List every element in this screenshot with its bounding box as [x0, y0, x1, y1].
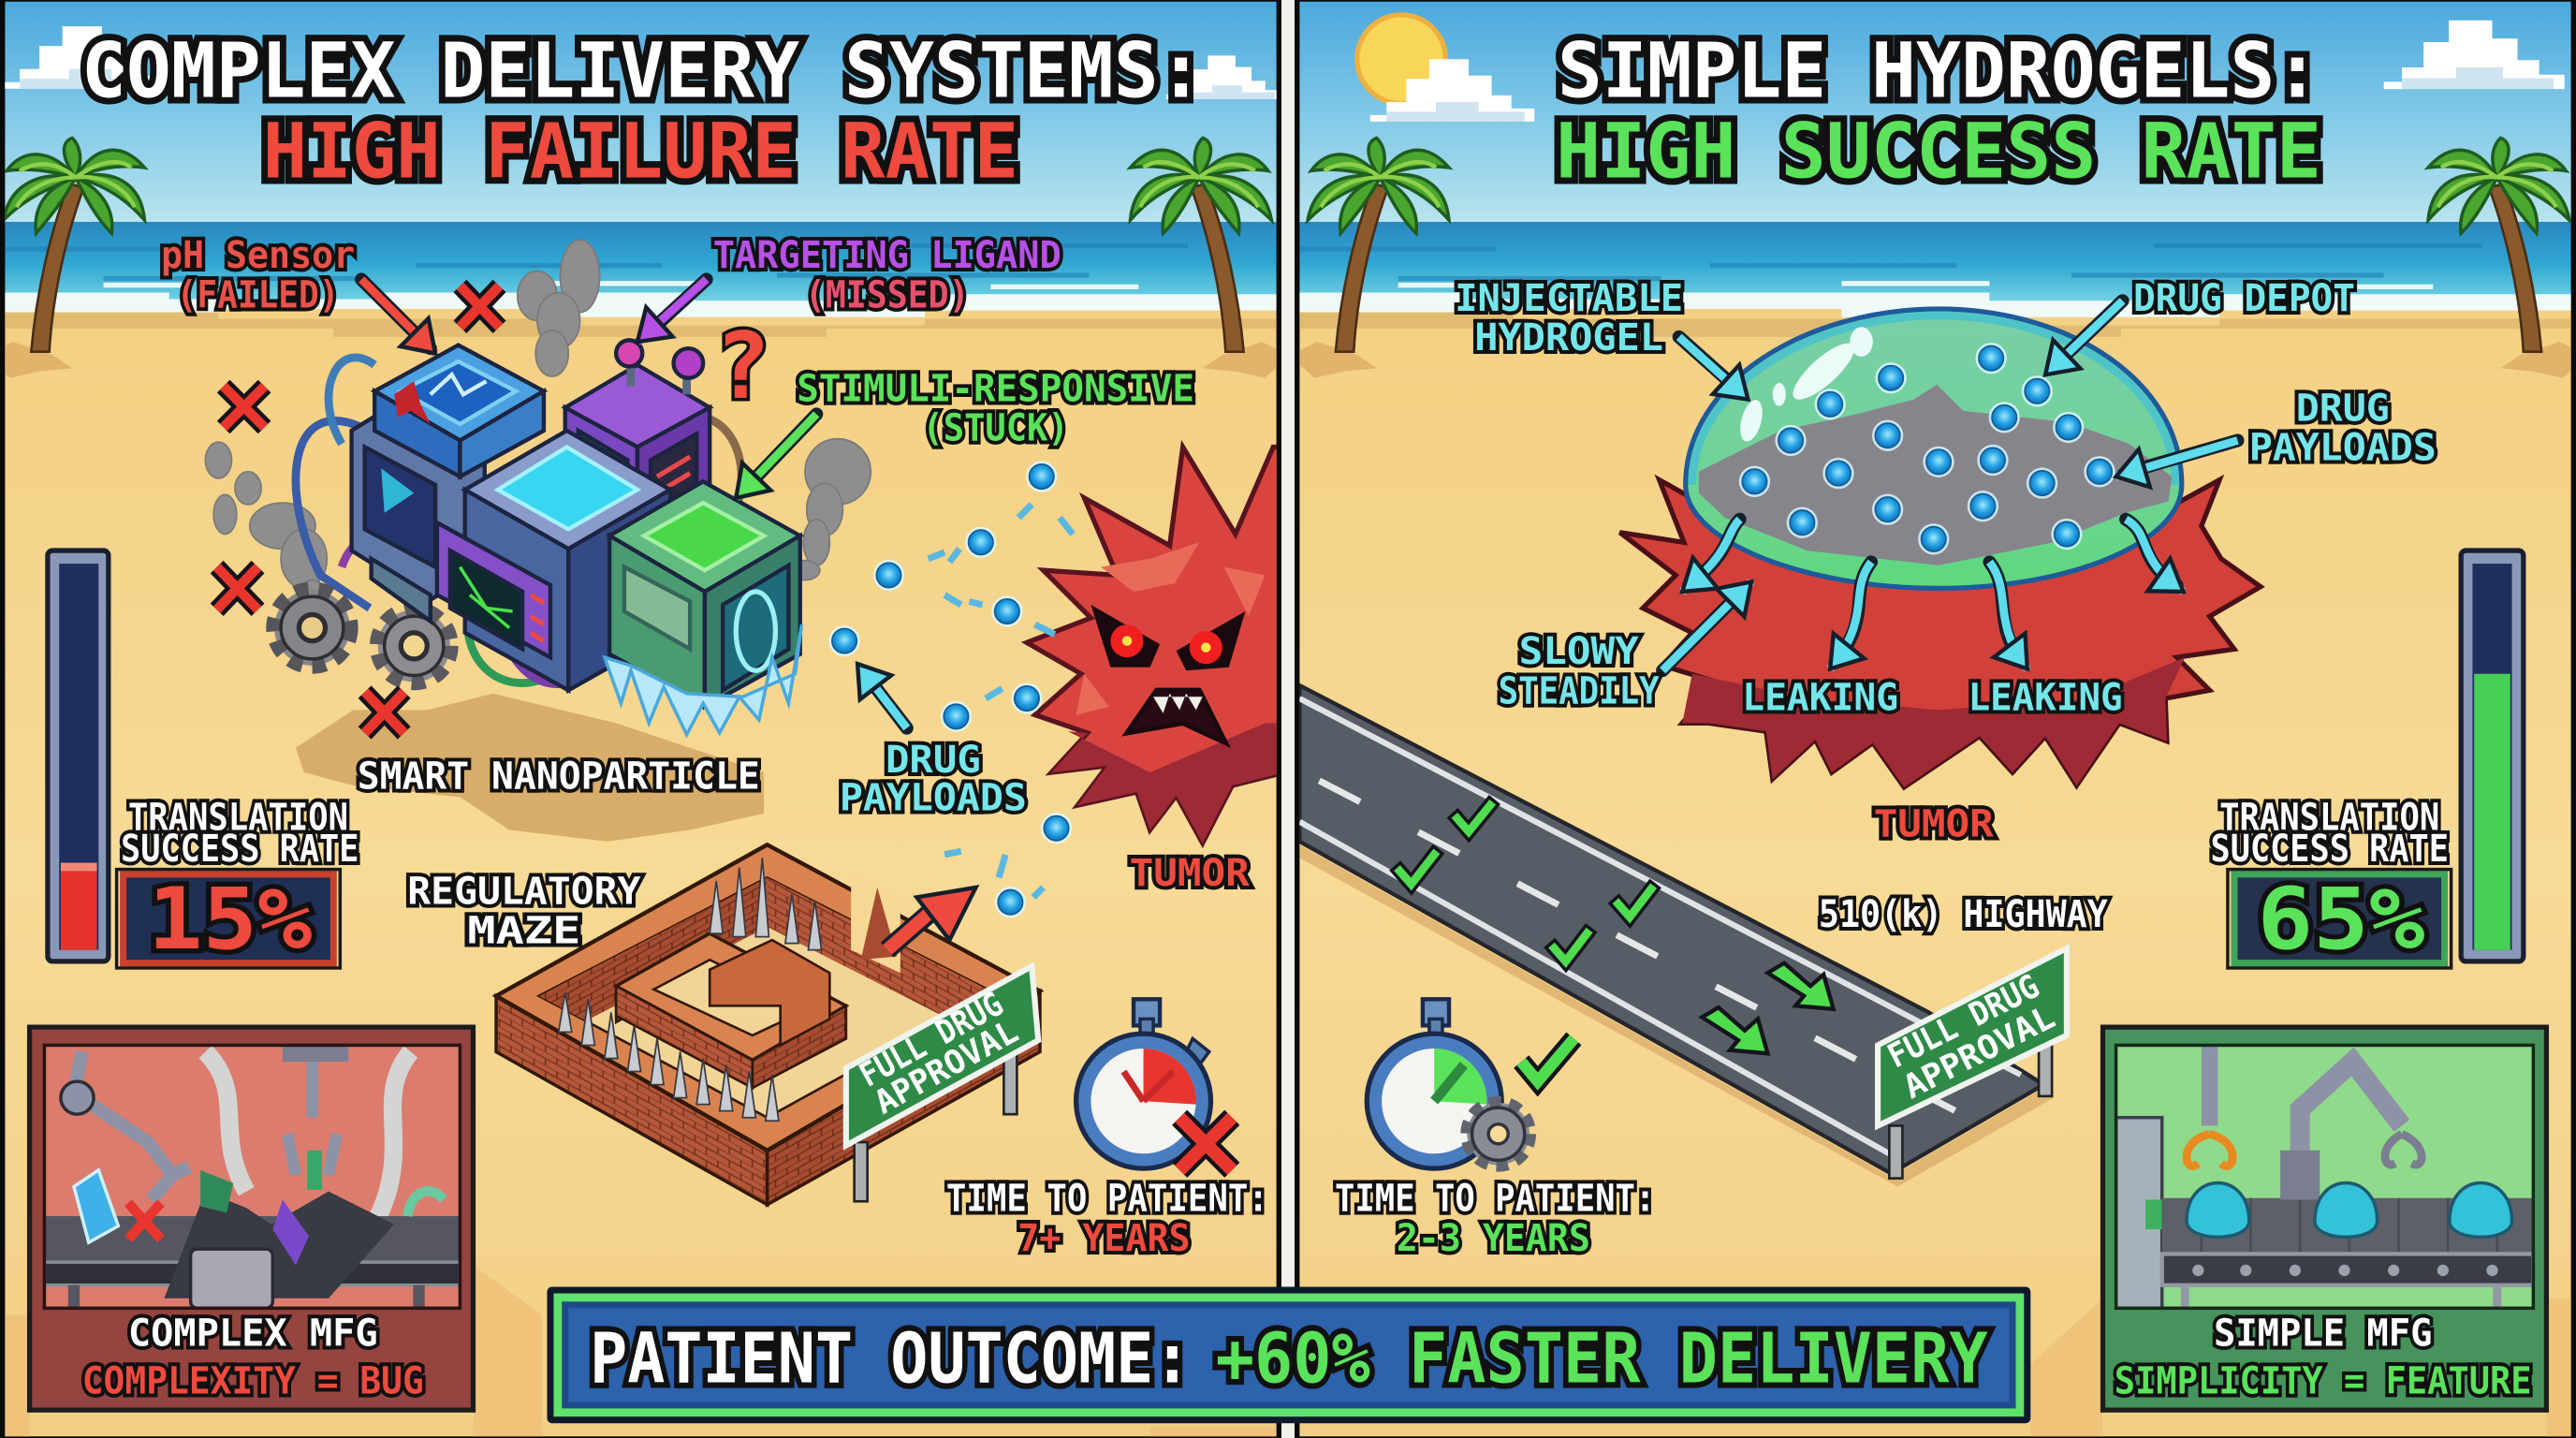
label: pH sensor: (FAILED) — [177, 272, 339, 316]
label: drug payloads right: PAYLOADS — [2249, 426, 2437, 470]
label: time to patient 2-3 years — [1335, 1177, 1655, 1260]
label: simple mfg — [2115, 1312, 2532, 1403]
beach background left — [5, 0, 1277, 1438]
label: simple mfg: SIMPLICITY = FEATURE — [2115, 1359, 2532, 1403]
sign: full drug approval left — [846, 966, 1038, 1201]
leak arrows — [1662, 520, 2184, 670]
label: tumor right: TUMOR — [1874, 802, 1995, 846]
purple targeting cube — [561, 338, 713, 497]
label: slowly steadily — [1499, 629, 1660, 712]
sign: full drug approval right: APPROVAL — [1897, 998, 2061, 1107]
label: translation success rate right: SUCCESS RATE — [2210, 827, 2449, 871]
maze exit arrow — [861, 888, 976, 960]
palm tree left — [0, 138, 144, 378]
label: time to patient 7+ years: TIME TO PATIENT: — [946, 1177, 1268, 1221]
title left — [81, 28, 1204, 197]
stopwatch check — [1521, 1038, 1573, 1081]
sign: full drug approval left: FULL DRUG — [853, 985, 1010, 1095]
highway check marks — [1399, 805, 1651, 961]
stimuli-responsive green cube — [609, 481, 800, 707]
sign: full drug approval left: APPROVAL — [868, 1012, 1025, 1123]
tumor left — [1027, 447, 1284, 844]
palm tree right — [1131, 138, 1290, 378]
label: translation success rate right — [2210, 795, 2449, 871]
drug payload particles left — [828, 461, 1073, 917]
label: translation success rate right: TRANSLATION — [2219, 795, 2439, 839]
label: translation success rate left — [121, 795, 359, 871]
highway — [1299, 685, 2054, 1186]
title left: HIGH FAILURE RATE — [263, 109, 1018, 197]
pH sensor cube — [374, 345, 544, 477]
arrow: drug payloads right — [2116, 440, 2237, 477]
highway green arrows — [1702, 963, 1834, 1053]
nanoparticle ground shadow — [296, 694, 764, 842]
banner: patient outcome: PATIENT OUTCOME: — [590, 1319, 1191, 1399]
label: injectable hydrogel: HYDROGEL — [1474, 315, 1663, 360]
darker sand patches — [2030, 1299, 2571, 1438]
spikes — [559, 858, 822, 1121]
success bar left — [48, 550, 109, 961]
central cyan cube — [465, 431, 670, 690]
banner: patient outcome — [547, 1287, 2030, 1423]
question mark: ? — [715, 314, 770, 420]
darker sand patches — [5, 1266, 1277, 1438]
stopwatch fast — [1367, 999, 1530, 1168]
label: drug payloads left: DRUG — [886, 738, 981, 782]
stat box: 65%: 65% — [2258, 869, 2425, 969]
title right: SIMPLE HYDROGELS: — [1558, 28, 2320, 116]
label: leaking: LEAKING — [1969, 675, 2123, 719]
factory scene: clean line — [2116, 1045, 2533, 1308]
label: targeting ligand: (MISSED) — [805, 272, 970, 316]
factory scene: broken line — [44, 1045, 460, 1308]
label: drug payloads left: PAYLOADS — [840, 775, 1027, 819]
title left: COMPLEX DELIVERY SYSTEMS: — [81, 28, 1204, 116]
arrow: drug depot — [2045, 301, 2123, 374]
smoke plumes — [205, 240, 871, 603]
title right — [1556, 28, 2321, 197]
label: simple mfg: SIMPLE MFG — [2214, 1312, 2432, 1356]
arrow: targeting ligand — [637, 279, 707, 342]
label: tumor left: TUMOR — [1130, 851, 1250, 895]
label: injectable hydrogel: INJECTABLE — [1455, 276, 1683, 320]
label: translation success rate left: SUCCESS RATE — [121, 827, 359, 871]
label: leaking: LEAKING — [1742, 675, 1898, 719]
frozen ice crust — [605, 624, 801, 735]
label: drug payloads right: DRUG — [2296, 386, 2390, 430]
label: complex mfg: COMPLEXITY = BUG — [82, 1359, 424, 1403]
regulatory maze — [496, 844, 1040, 1205]
label: stimuli-responsive: (STUCK) — [922, 405, 1069, 449]
arrow: stimuli-responsive — [736, 414, 816, 498]
clouds right — [1370, 21, 2565, 122]
panel: complex mfg — [30, 1027, 473, 1410]
label: drug depot: DRUG DEPOT — [2133, 276, 2355, 320]
arrow: drug payloads — [857, 664, 907, 728]
beach background right — [1299, 0, 2571, 1438]
stopwatch x — [1179, 1118, 1232, 1170]
label: 510(k) highway: 510(k) HIGHWAY — [1819, 892, 2108, 936]
wires — [296, 358, 741, 684]
stat box: 15% — [117, 869, 340, 969]
sun — [1357, 15, 1445, 104]
stat box: 65% — [2228, 869, 2452, 969]
label: slowly steadily: STEADILY — [1499, 668, 1660, 712]
tumor right — [1620, 480, 2261, 787]
label: time to patient 2-3 years: TIME TO PATIENT: — [1335, 1177, 1655, 1221]
label: pH sensor — [161, 233, 355, 316]
label: regulatory maze: REGULATORY — [407, 869, 641, 913]
broken gears — [274, 590, 450, 682]
banner: patient outcome: +60% FASTER DELIVERY — [1216, 1319, 1988, 1399]
label: targeting ligand: TARGETING LIGAND — [713, 233, 1061, 277]
arrow: pH sensor — [361, 279, 435, 353]
clouds left — [4, 26, 1281, 99]
label: complex mfg: COMPLEX MFG — [128, 1312, 378, 1356]
success bar right — [2461, 550, 2524, 961]
failure X marks — [217, 286, 500, 733]
back grey-blue module — [352, 394, 485, 622]
label: stimuli-responsive — [797, 366, 1194, 449]
label: smart nanoparticle: SMART NANOPARTICLE — [358, 755, 760, 799]
palm tree right — [2428, 138, 2576, 378]
hydrogel products — [2187, 1182, 2512, 1237]
label: targeting ligand — [713, 233, 1061, 316]
label: time to patient 2-3 years: 2-3 YEARS — [1397, 1216, 1590, 1260]
centre gutter — [1281, 0, 1295, 1438]
palm tree left — [1290, 138, 1449, 378]
label: translation success rate left: TRANSLATION — [128, 795, 348, 839]
purple front screen module — [437, 522, 550, 657]
stopwatch slow — [1076, 999, 1211, 1168]
sign: full drug approval right — [1878, 948, 2067, 1179]
smart nanoparticle machine — [352, 340, 800, 707]
label: drug payloads left — [840, 738, 1027, 819]
label: stimuli-responsive: STIMULI-RESPONSIVE — [797, 366, 1194, 410]
sign: full drug approval right: FULL DRUG — [1881, 967, 2045, 1076]
title right: HIGH SUCCESS RATE — [1556, 109, 2321, 197]
label: time to patient 7+ years — [946, 1177, 1268, 1260]
label: complex mfg — [82, 1312, 424, 1403]
label: regulatory maze — [407, 869, 641, 953]
panel: simple hydrogels (right) — [1290, 0, 2576, 1438]
arrow: injectable hydrogel — [1679, 337, 1748, 400]
panel: complex delivery systems (left) — [0, 0, 1290, 1438]
label: time to patient 7+ years: 7+ YEARS — [1017, 1216, 1191, 1260]
stat box: 15%: 15% — [148, 869, 313, 969]
label: pH sensor: pH Sensor — [161, 233, 355, 277]
panel: simple mfg — [2103, 1027, 2546, 1410]
drug payload particles right — [1739, 343, 2115, 554]
label: drug payloads right — [2249, 386, 2437, 470]
label: slowly steadily: SLOWY — [1519, 629, 1639, 673]
label: injectable hydrogel — [1455, 276, 1683, 360]
hydrogel dome — [1686, 309, 2182, 588]
maze gap — [851, 888, 900, 974]
inner walls — [614, 997, 622, 1024]
label: regulatory maze: MAZE — [467, 909, 580, 953]
